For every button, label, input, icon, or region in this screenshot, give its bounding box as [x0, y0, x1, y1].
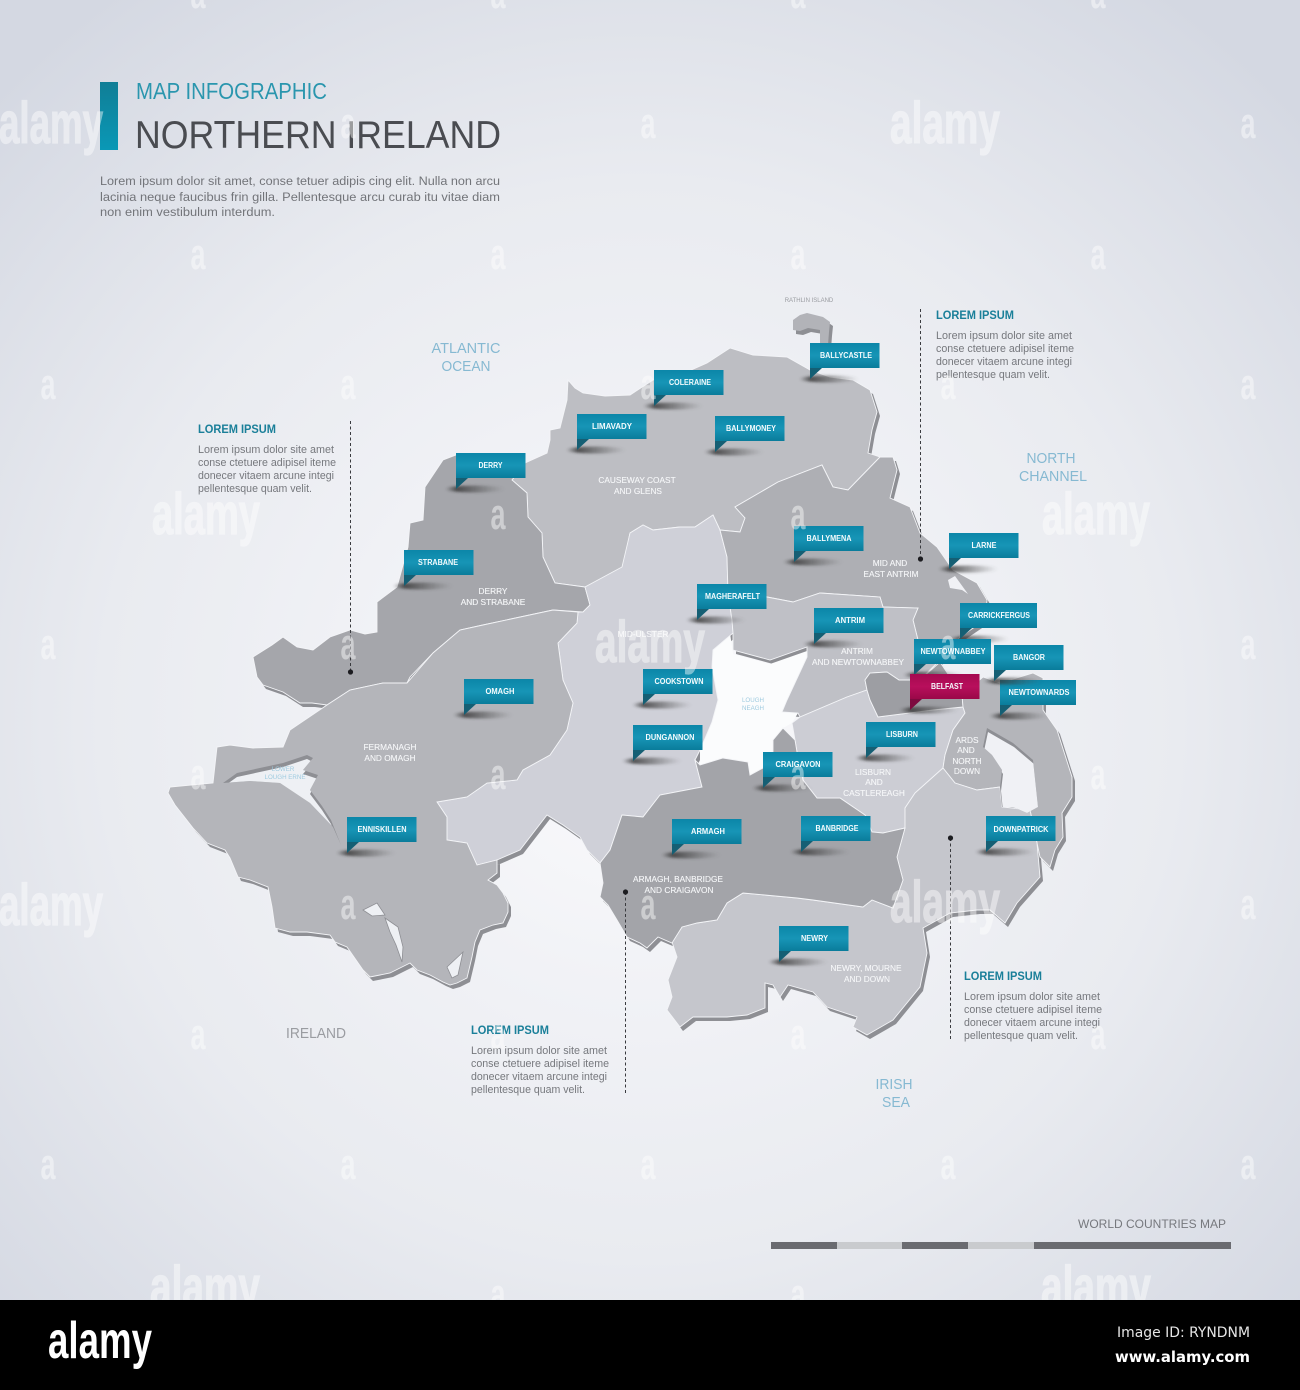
flag: Magherafelt: MAGHERAFELT: [705, 592, 760, 601]
stock watermarks: a: [790, 750, 806, 799]
title block: [100, 78, 501, 219]
flag: Carrickfergus: CARRICKFERGUS: [968, 611, 1030, 620]
label: Causeway Coast and Glens: [598, 475, 676, 496]
map of Northern Ireland: [168, 313, 1075, 1039]
flag: Belfast: BELFAST: [931, 682, 963, 691]
flag: Omagh: [453, 679, 534, 718]
region: Belfast: [865, 662, 963, 717]
stock watermarks: a: [490, 490, 506, 539]
stock watermarks: a: [1240, 1140, 1256, 1189]
stock watermarks: a: [790, 490, 806, 539]
callout: west: LOREM IPSUM: [198, 424, 276, 436]
sea and neighbour labels: [286, 340, 1087, 1111]
flag: Strabane: [393, 550, 474, 590]
flag: Enniskillen: [336, 817, 416, 856]
label: Atlantic Ocean: ATLANTIC: [432, 340, 501, 357]
flag: Limavady: [566, 414, 646, 454]
stock watermarks: a: [640, 99, 656, 148]
intro paragraph: Lorem ipsum dolor sit amet, conse tetuer adipis cing elit. Nulla non arcu: [100, 174, 500, 188]
label: Causeway Coast and Glens: CAUSEWAY COAST: [598, 475, 676, 485]
stock watermarks: a: [340, 620, 356, 669]
stock watermarks: a: [340, 1140, 356, 1189]
stock watermarks: alamy: [150, 1255, 260, 1320]
label: Lisburn and Castlereagh: [843, 767, 905, 798]
label: Armagh, Banbridge and Craigavon: AND CRAIGAVON: [644, 885, 714, 895]
stock watermarks: a: [640, 1140, 656, 1189]
stock watermarks: alamy: [0, 91, 103, 156]
flag: Larne: [938, 533, 1018, 572]
stock watermarks: a: [40, 360, 56, 409]
Larne Lough: [948, 576, 968, 594]
label: Causeway Coast and Glens: AND GLENS: [614, 486, 662, 496]
label: Derry and Strabane: AND STRABANE: [461, 597, 526, 607]
flag: Banbridge: [790, 816, 870, 856]
callout: south east: donecer vitaem arcune integi: [964, 1017, 1100, 1029]
stock watermarks: a: [790, 1270, 806, 1319]
label: Derry and Strabane: [461, 586, 526, 607]
region: Antrim and Newtownabbey: [728, 593, 940, 717]
callout: south: conse ctetuere adipisel iteme: [471, 1058, 609, 1070]
flag: Larne: LARNE: [972, 541, 996, 550]
label: Mid and East Antrim: MID AND: [873, 558, 907, 568]
stock watermarks: a: [40, 620, 56, 669]
stock watermarks: alamy: [0, 873, 103, 938]
label: Armagh, Banbridge and Craigavon: [633, 874, 723, 895]
flag: Cookstown: COOKSTOWN: [654, 677, 704, 686]
town flags: [336, 343, 1076, 966]
flag: Craigavon: CRAIGAVON: [776, 760, 821, 769]
flag: Newtownabbey: NEWTOWNABBEY: [920, 647, 986, 656]
stock watermarks: a: [490, 1010, 506, 1059]
label: Antrim and Newtownabbey: AND NEWTOWNABBEY: [812, 657, 904, 667]
flag: Coleraine: [643, 370, 724, 410]
stock watermarks: a: [940, 360, 956, 409]
flag: Newtownards: NEWTOWNARDS: [1008, 688, 1070, 697]
label: Derry and Strabane: DERRY: [479, 586, 508, 596]
region: Armagh, Banbridge and Craigavon: [600, 728, 905, 948]
stock watermarks: a: [1090, 1010, 1106, 1059]
callout: south: LOREM IPSUM: [471, 1025, 549, 1037]
label: Lough Neagh: LOUGH: [742, 697, 764, 704]
region: Ards and North Down: [943, 673, 1072, 867]
stock watermarks: a: [1090, 230, 1106, 279]
Lough Neagh: [700, 633, 807, 775]
callout: west: conse ctetuere adipisel iteme: [198, 457, 336, 469]
callout: west: Lorem ipsum dolor site amet: [198, 444, 334, 456]
flag: Derry: DERRY: [478, 461, 503, 470]
bottom credit strip: [0, 1300, 1300, 1390]
flag: Ballymoney: BALLYMONEY: [726, 424, 777, 433]
stock watermarks: a: [340, 360, 356, 409]
callout: south east: LOREM IPSUM: [964, 971, 1042, 983]
flag: Downpatrick: DOWNPATRICK: [994, 825, 1049, 834]
flag: Armagh: ARMAGH: [691, 827, 725, 836]
region: Lisburn and Castlereagh: [792, 690, 965, 833]
stock watermarks: a: [1240, 360, 1256, 409]
stock watermarks: a: [190, 1010, 206, 1059]
flag: Dungannon: DUNGANNON: [646, 733, 695, 742]
stock watermarks: a: [490, 1270, 506, 1319]
flag: Ballymena: [783, 526, 864, 566]
island: Rathlin: [793, 313, 830, 345]
label: Ards and North Down: DOWN: [954, 766, 980, 776]
label: Ards and North Down: AND: [957, 745, 975, 755]
stock watermarks: a: [190, 750, 206, 799]
callout: south east: Lorem ipsum dolor site amet: [964, 991, 1100, 1003]
label: Lough Neagh: NEAGH: [742, 705, 764, 712]
Lower Lough Erne: [223, 755, 341, 849]
scale footer: [771, 1217, 1231, 1249]
label: North Channel: CHANNEL: [1019, 468, 1087, 485]
callout: north east: LOREM IPSUM: [936, 310, 1014, 322]
label: Lisburn and Castlereagh: CASTLEREAGH: [843, 788, 905, 798]
region: Mid Ulster: [437, 515, 733, 865]
label: Lower Lough Erne: [265, 766, 305, 781]
flag: Ballycastle: BALLYCASTLE: [820, 351, 872, 360]
stock watermarks: alamy: [1042, 482, 1150, 547]
flag: Enniskillen: ENNISKILLEN: [358, 825, 407, 834]
flag: Cookstown: [632, 669, 712, 708]
stock watermarks: a: [40, 1140, 56, 1189]
subtitle: MAP INFOGRAPHIC: [136, 78, 327, 104]
label: Rathlin Island: RATHLIN ISLAND: [785, 298, 834, 304]
label: Lower Lough Erne: LOUGH ERNE: [265, 774, 305, 781]
label: Mid Ulster: MID-ULSTER: [618, 629, 668, 639]
label: Irish Sea: SEA: [882, 1094, 910, 1111]
flag: Armagh: [661, 819, 742, 858]
map 3D extrusion: [171, 317, 1075, 1039]
label: Ireland: IRELAND: [286, 1025, 346, 1042]
label: Lisburn and Castlereagh: LISBURN: [855, 767, 891, 777]
label: Irish Sea: IRISH: [876, 1076, 912, 1093]
stock watermarks: alamy: [1041, 1255, 1151, 1320]
stock watermarks: a: [790, 1010, 806, 1059]
callout: south east: pellentesque quam velit.: [964, 1030, 1078, 1042]
callout: north east: pellentesque quam velit.: [936, 369, 1050, 381]
stock watermarks: a: [490, 750, 506, 799]
callout: north east: donecer vitaem arcune integi: [936, 356, 1072, 368]
label: Antrim and Newtownabbey: ANTRIM: [841, 646, 873, 656]
callout: north east: [918, 309, 1074, 562]
stock watermarks: a: [640, 360, 656, 409]
callout: south: Lorem ipsum dolor site amet: [471, 1045, 607, 1057]
label: Fermanagh and Omagh: AND OMAGH: [364, 753, 416, 763]
region: Newry, Mourne and Down: [667, 768, 1040, 1035]
stock watermarks: a: [940, 620, 956, 669]
title: NORTHERN IRELAND: [135, 114, 501, 157]
label: Atlantic Ocean: OCEAN: [442, 358, 490, 375]
flag: Strabane: STRABANE: [418, 558, 458, 567]
Strangford Lough: [983, 728, 1039, 817]
stock watermarks: alamy: [152, 482, 260, 547]
flag: Antrim: [803, 608, 884, 648]
stock watermarks: a: [1240, 880, 1256, 929]
stock watermarks: a: [1090, 750, 1106, 799]
flag: Carrickfergus: [949, 603, 1037, 642]
label: Newry, Mourne and Down: NEWRY, MOURNE: [830, 963, 902, 973]
region: Fermanagh and Omagh: [168, 610, 578, 985]
callout: north east: conse ctetuere adipisel iteme: [936, 343, 1074, 355]
stock watermarks: a: [340, 99, 356, 148]
flag: Ballymoney: [704, 416, 784, 456]
region: Causeway Coast and Glens: [512, 348, 880, 587]
stock watermarks: a: [640, 880, 656, 929]
label: Lisburn and Castlereagh: AND: [865, 777, 883, 787]
footer bar: [771, 1242, 1231, 1249]
label: North Channel: NORTH: [1026, 450, 1076, 467]
label: Fermanagh and Omagh: [363, 742, 417, 763]
label: North Channel: [1019, 450, 1087, 485]
region: Mid and East Antrim: [720, 457, 987, 660]
flag: Derry: [445, 453, 526, 492]
flag: Lisburn: LISBURN: [886, 730, 918, 739]
label: Antrim and Newtownabbey: [812, 646, 904, 667]
stock watermarks: a: [1240, 620, 1256, 669]
region labels: [265, 298, 982, 984]
stock watermarks: a: [1240, 99, 1256, 148]
stock watermarks: a: [790, 230, 806, 279]
label: Armagh, Banbridge and Craigavon: ARMAGH, BANBRIDGE: [633, 874, 723, 884]
title accent bar: [100, 82, 118, 150]
label: Mid and East Antrim: EAST ANTRIM: [863, 569, 919, 579]
flag: Newry: [768, 926, 848, 966]
region: Derry and Strabane: [253, 455, 590, 705]
callout: west: donecer vitaem arcune integi: [198, 470, 334, 482]
flag: Coleraine: COLERAINE: [669, 378, 711, 387]
flag: Belfast: [899, 674, 980, 714]
website: www.alamy.com: [1115, 1348, 1250, 1366]
southern loughs: [363, 903, 463, 978]
label: Mid and East Antrim: [863, 558, 919, 579]
info callouts: [198, 309, 1102, 1096]
flag: Antrim: ANTRIM: [835, 616, 865, 625]
label: Fermanagh and Omagh: FERMANAGH: [363, 742, 417, 752]
callout: north east: Lorem ipsum dolor site amet: [936, 330, 1072, 342]
label: Ards and North Down: [952, 735, 982, 776]
flag: Banbridge: BANBRIDGE: [816, 824, 858, 833]
flag: Newtownards: [989, 680, 1076, 720]
label: Lower Lough Erne: LOWER: [272, 766, 295, 773]
label: Atlantic Ocean: [432, 340, 501, 375]
flag: Ballycastle: [799, 343, 880, 382]
flag: Newtownabbey: [903, 639, 991, 678]
intro paragraph: lacinia neque faucibus frin gilla. Pellentesque arcu curab itu vitae diam: [100, 190, 500, 204]
label: Ards and North Down: NORTH: [952, 756, 982, 766]
stock watermarks: alamy: [595, 610, 705, 675]
label: Newry, Mourne and Down: AND DOWN: [844, 974, 890, 984]
intro paragraph: non enim vestibulum interdum.: [100, 205, 275, 219]
flag: Newry: NEWRY: [801, 934, 829, 943]
flag: Bangor: BANGOR: [1013, 653, 1045, 662]
callout: south: donecer vitaem arcune integi: [471, 1071, 607, 1083]
label: Lough Neagh: [742, 697, 764, 712]
flag: Dungannon: [622, 725, 702, 764]
callout: west: pellentesque quam velit.: [198, 483, 312, 495]
image id: Image ID: RYNDNM: [1117, 1325, 1250, 1341]
flag: Craigavon: [752, 752, 832, 792]
label: Ards and North Down: ARDS: [955, 735, 979, 745]
intro paragraph: [100, 174, 500, 219]
flag: Lisburn: [855, 722, 936, 762]
stock watermarks: alamy: [890, 91, 1000, 156]
flag: Limavady: LIMAVADY: [592, 422, 633, 431]
callout: south: pellentesque quam velit.: [471, 1084, 585, 1096]
callout: south east: [948, 835, 1102, 1042]
label: Newry, Mourne and Down: [830, 963, 902, 984]
stock watermarks: a: [340, 880, 356, 929]
flag: Downpatrick: [975, 816, 1056, 856]
alamy logo: alamy: [48, 1312, 152, 1370]
stock watermarks: a: [940, 1140, 956, 1189]
label: Irish Sea: [876, 1076, 912, 1111]
flag: Magherafelt: [686, 584, 766, 624]
footer caption: WORLD COUNTRIES MAP: [1078, 1217, 1226, 1231]
stock watermarks: a: [490, 230, 506, 279]
flag: Ballymena: BALLYMENA: [806, 534, 852, 543]
callout: west: [198, 421, 353, 675]
flag: Omagh: OMAGH: [486, 687, 515, 696]
stock watermarks: alamy: [890, 870, 1000, 935]
callout: south: [471, 889, 628, 1096]
stock watermarks: a: [190, 230, 206, 279]
callout: south east: conse ctetuere adipisel iteme: [964, 1004, 1102, 1016]
flag: Bangor: [983, 645, 1064, 684]
